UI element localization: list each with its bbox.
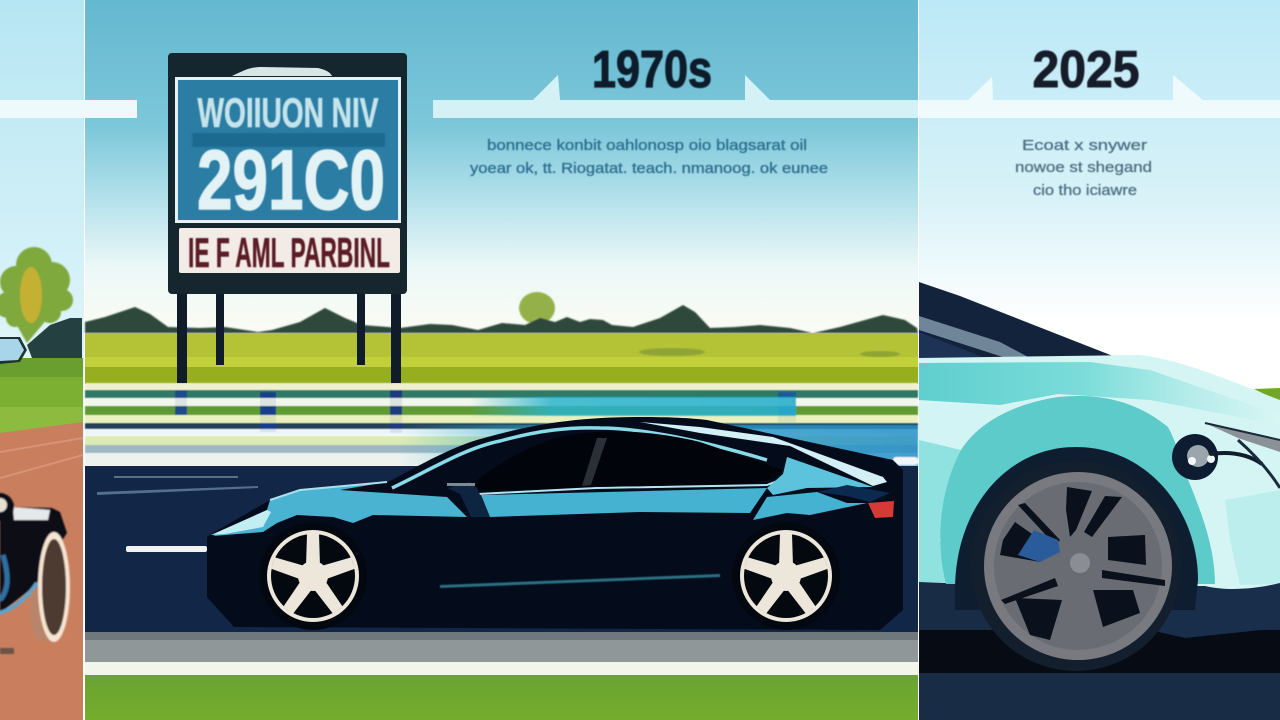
panel: right era 2025 xyxy=(919,0,1280,720)
car side streak xyxy=(440,574,720,588)
billboard posts xyxy=(177,293,401,383)
billboard top lamp xyxy=(232,67,332,76)
left ground xyxy=(0,358,83,720)
billboard lower panel xyxy=(179,228,400,276)
panel: middle era 1970s xyxy=(85,0,918,720)
distant tree xyxy=(519,292,555,328)
road xyxy=(85,466,918,720)
description 2025: nowoe st shegand xyxy=(1015,159,1152,176)
front wheel xyxy=(259,522,367,630)
car rear quarter glass xyxy=(767,457,873,495)
year label 2025: 2025 xyxy=(1032,41,1140,99)
billboard lower panel: IE F AML PARBINL xyxy=(188,229,390,276)
sports car xyxy=(207,417,903,630)
car rear dark accent xyxy=(817,485,890,502)
windscreen xyxy=(919,282,1118,358)
charge cable xyxy=(1210,453,1262,464)
headlight xyxy=(1205,423,1280,488)
car fender highlight xyxy=(213,482,467,536)
body shell xyxy=(919,355,1280,590)
wheel arch xyxy=(955,447,1198,610)
timeline band right xyxy=(919,75,1280,118)
timeline band left xyxy=(0,100,137,118)
description 2025: cio tho iciawre xyxy=(1033,182,1137,199)
electric car xyxy=(919,282,1280,671)
alloy wheel xyxy=(971,461,1181,671)
car tail light xyxy=(868,501,894,518)
wheel openings xyxy=(1000,487,1165,640)
sign small text: WOIIUON NIV xyxy=(198,89,378,136)
charge port xyxy=(1172,434,1262,480)
distant hills xyxy=(85,305,918,333)
icon: vintage car xyxy=(0,493,70,654)
motion stripes xyxy=(85,383,918,466)
car hood top line xyxy=(270,482,387,500)
billboard frame xyxy=(168,53,407,294)
timeline band xyxy=(433,75,918,118)
rear body pale xyxy=(919,403,1000,450)
car roof glass streak xyxy=(640,422,887,486)
lower body xyxy=(1150,583,1280,638)
car body xyxy=(207,417,903,630)
car windows xyxy=(468,431,783,491)
car rear quarter xyxy=(753,492,867,520)
car shoulder line xyxy=(478,476,790,494)
car door highlight xyxy=(481,488,767,517)
shoulder band xyxy=(919,362,1280,425)
road right xyxy=(919,582,1280,720)
wheel caliper xyxy=(1018,530,1060,562)
car mirror and pillar xyxy=(447,482,490,517)
description 1970s: bonnece konbit oahlonosp oio blagsarat oil xyxy=(487,137,807,154)
distant grass xyxy=(1254,388,1280,402)
panel: left era xyxy=(0,0,84,720)
year label 1970s: 1970s xyxy=(592,41,712,99)
wheel arch fender xyxy=(940,396,1215,584)
field xyxy=(85,333,918,384)
car hood highlight xyxy=(211,510,271,535)
icon: tree xyxy=(0,247,73,343)
rear lower body xyxy=(919,440,961,582)
left water and hill xyxy=(0,318,82,364)
sign big number: 291C0 xyxy=(197,133,385,227)
description 1970s: yoear ok, tt. Riogatat. teach. nmanoog. ok eunee xyxy=(470,160,828,177)
right body shade xyxy=(1225,490,1280,585)
car roof pale line xyxy=(392,428,767,488)
billboard xyxy=(168,53,407,383)
description 1970s xyxy=(470,137,828,177)
description 2025: Ecoat x snywer xyxy=(1022,137,1147,154)
rear wheel xyxy=(732,522,840,630)
billboard blue panel xyxy=(175,77,401,227)
description 2025 xyxy=(1015,137,1152,199)
